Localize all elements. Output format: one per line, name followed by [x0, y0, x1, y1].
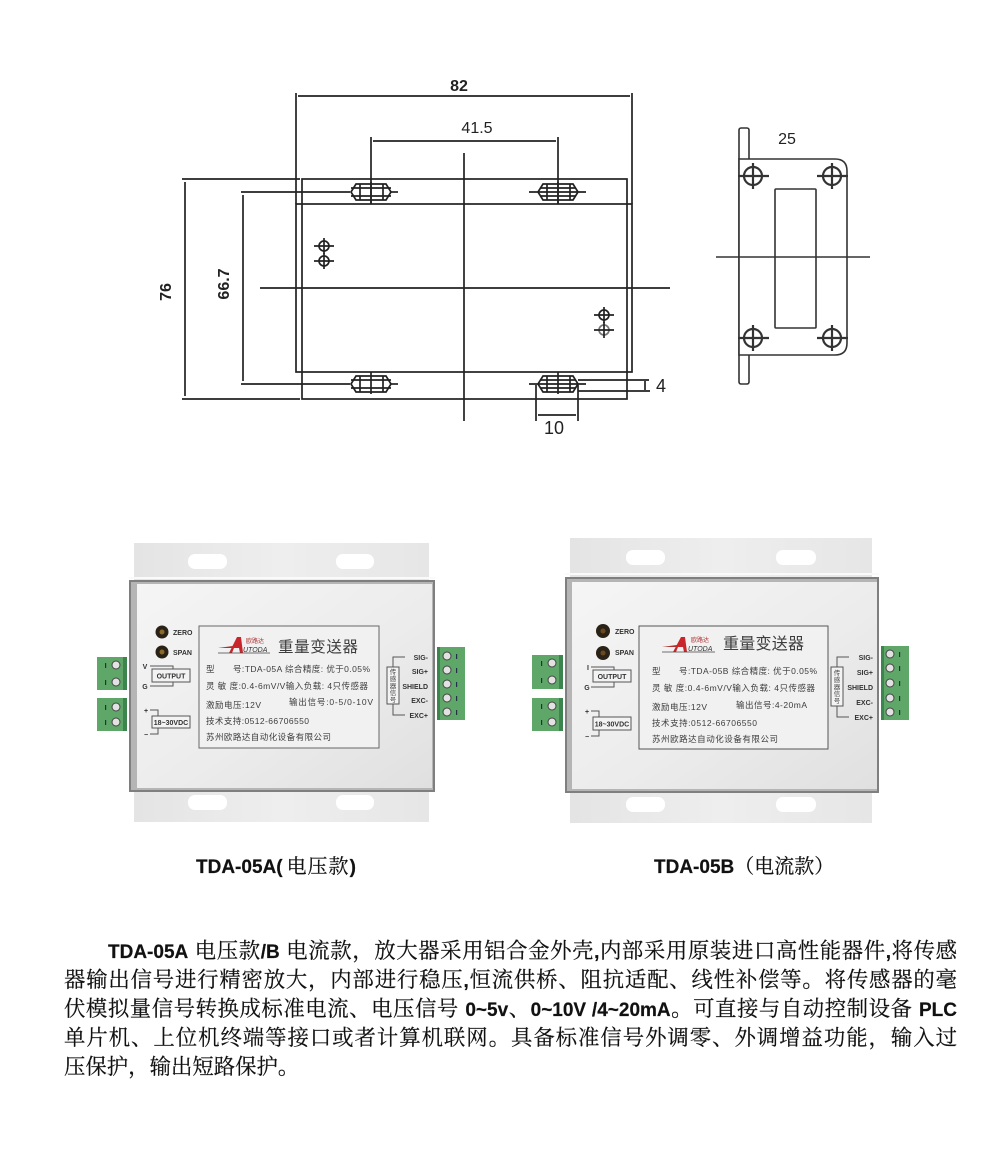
label lines A: 输出信号:0-5/0-10V [289, 697, 373, 707]
power terminal B [585, 709, 631, 741]
description paragraph: 器输出信号进行精密放大，内部进行稳压,恒流供桥、阻抗适配、线性补偿等。将传感器的毫 [64, 968, 957, 992]
label lines A: 苏州欧路达自动化设备有限公司 [206, 732, 331, 742]
label lines B [652, 666, 817, 744]
connector right B [881, 646, 909, 720]
power terminal B: 18~30VDC [595, 722, 629, 728]
sensor signal terminal A: 信 [390, 688, 397, 697]
sensor signal terminal A: EXC+ [410, 713, 428, 720]
knobs A: SPAN [173, 650, 192, 657]
label lines B: 型 [652, 666, 661, 676]
description paragraph: TDA-05A 电压款/B 电流款，放大器采用铝合金外壳,内部采用原装进口高性能器件,将传感 [108, 939, 957, 963]
connector left upper B [532, 655, 563, 689]
mounting plate B [565, 538, 879, 823]
label lines A [206, 664, 373, 742]
logo B [662, 636, 715, 653]
side view: corner screws [738, 163, 848, 351]
output terminal A [142, 664, 190, 691]
logo A [218, 637, 270, 654]
description paragraph: 单片机、上位机终端等接口或者计算机联网。具备标准信号外调零、外调增益功能，输入过 [64, 1026, 957, 1050]
sensor signal terminal A: SHIELD [402, 684, 428, 691]
label lines A: 型 [206, 664, 215, 674]
dimension: hole spacing 66.7: 66.7 [216, 268, 233, 300]
side dimension drawing [716, 128, 870, 384]
output terminal B: I [587, 665, 589, 672]
side view: dimension 25: 25 [778, 131, 796, 148]
output terminal B: OUTPUT [598, 674, 627, 681]
output terminal A: V [143, 664, 148, 671]
sensor signal terminal A [387, 655, 429, 720]
sensor signal terminal B: SIG- [859, 655, 874, 662]
logo A: 欧路达 [246, 637, 264, 645]
dimension: slot length 10: 10 [544, 418, 564, 438]
mounting slot bottom right [529, 372, 586, 394]
drawing: center lines [260, 153, 670, 421]
power terminal A: 18~30VDC [154, 720, 188, 727]
sensor signal terminal B: SHIELD [847, 685, 873, 692]
power terminal A: + [144, 708, 148, 715]
front dimension drawing [158, 78, 670, 438]
screw holes left [314, 238, 334, 269]
knobs A [156, 626, 193, 658]
output terminal A: G [142, 684, 148, 691]
spec label B [639, 626, 828, 749]
power terminal A [144, 708, 190, 739]
connector left lower B [532, 698, 563, 731]
description paragraph: 伏模拟量信号转换成标准电流、电压信号 0~5v、0~10V /4~20mA。可直接与自动控制设备 PLC [64, 997, 957, 1021]
label lines A: 技术支持:0512-66706550 [206, 716, 309, 726]
label title A: 重量变送器 [278, 638, 358, 656]
label lines B: 苏州欧路达自动化设备有限公司 [652, 734, 778, 744]
power terminal A: − [144, 732, 148, 739]
description paragraph: 压保护，输出短路保护。 [64, 1055, 299, 1079]
description paragraph [64, 939, 957, 1079]
sensor signal terminal B: 传 [834, 668, 841, 677]
connector right A [437, 647, 465, 720]
sensor signal terminal A: 传 [390, 667, 397, 676]
logo A: UTODA [243, 647, 268, 654]
label lines B: 号:TDA-05B 综合精度: 优于0.05% [679, 666, 817, 676]
label lines B: 技术支持:0512-66706550 [652, 718, 757, 728]
knobs B [596, 624, 635, 660]
housing A [129, 580, 435, 792]
side view: bracket and body [716, 128, 870, 384]
caption: TDA-05B: TDA-05B（电流款） [654, 856, 834, 878]
dimension: slot height 4: 4 [656, 376, 666, 396]
output terminal B: G [584, 685, 590, 692]
product photo: TDA-05A [97, 543, 465, 822]
sensor signal terminal B: 器 [834, 683, 841, 691]
sensor signal terminal B: 感 [834, 675, 841, 684]
caption: TDA-05A: TDA-05A(电压款) [196, 856, 356, 878]
label lines B: 输出信号:4-20mA [736, 700, 807, 710]
sensor signal terminal A: 号 [390, 696, 397, 704]
connector left upper A [97, 657, 127, 690]
dimension: hole spacing 41.5: 41.5 [461, 120, 493, 137]
label lines A: 激励电压:12V [206, 700, 261, 710]
sensor signal terminal B: 号 [834, 697, 841, 705]
sensor signal terminal B: SIG+ [857, 670, 873, 677]
mounting slot bottom left [351, 372, 398, 394]
label lines A: 灵 敏 度:0.4-6mV/V输入负载: 4只传感器 [206, 681, 368, 691]
spec label A [199, 626, 379, 748]
sensor signal terminal A: SIG- [414, 655, 429, 662]
power terminal B: − [585, 734, 589, 741]
knobs A: ZERO [173, 630, 193, 637]
output terminal B [584, 665, 631, 692]
label lines A: 号:TDA-05A 综合精度: 优于0.05% [233, 664, 370, 674]
dimension: width 82: 82 [450, 78, 468, 95]
sensor signal terminal B: EXC+ [855, 715, 873, 722]
sensor signal terminal B: 信 [834, 689, 841, 698]
knobs B: ZERO [615, 629, 635, 636]
drawing: housing outline [296, 179, 632, 399]
label lines B: 灵 敏 度:0.4-6mV/V输入负载: 4只传感器 [652, 683, 815, 693]
sensor signal terminal A: EXC- [411, 698, 429, 705]
dimension: slot height 4 [578, 376, 666, 396]
screw holes right [594, 307, 614, 338]
logo B: 欧路达 [691, 636, 709, 644]
connector left lower A [97, 698, 127, 731]
output terminal A: OUTPUT [157, 674, 186, 680]
mounting plate A [129, 543, 435, 822]
mounting slot top left [351, 182, 398, 204]
label lines B: 激励电压:12V [652, 702, 707, 712]
logo B: UTODA [688, 646, 713, 653]
sensor signal terminal B [831, 655, 874, 722]
label title B: 重量变送器 [723, 635, 804, 653]
sensor signal terminal A: 感 [390, 674, 397, 683]
sensor signal terminal A: 器 [390, 682, 397, 690]
knobs B: SPAN [615, 650, 634, 657]
housing B [565, 577, 879, 793]
dimension: slot length 10 [536, 385, 578, 438]
sensor signal terminal B: EXC- [856, 700, 874, 707]
power terminal B: + [585, 709, 589, 716]
dimension: height 76: 76 [158, 283, 175, 301]
product photo: TDA-05B [532, 538, 909, 823]
mounting slot top right [529, 182, 586, 204]
sensor signal terminal A: SIG+ [412, 669, 428, 676]
